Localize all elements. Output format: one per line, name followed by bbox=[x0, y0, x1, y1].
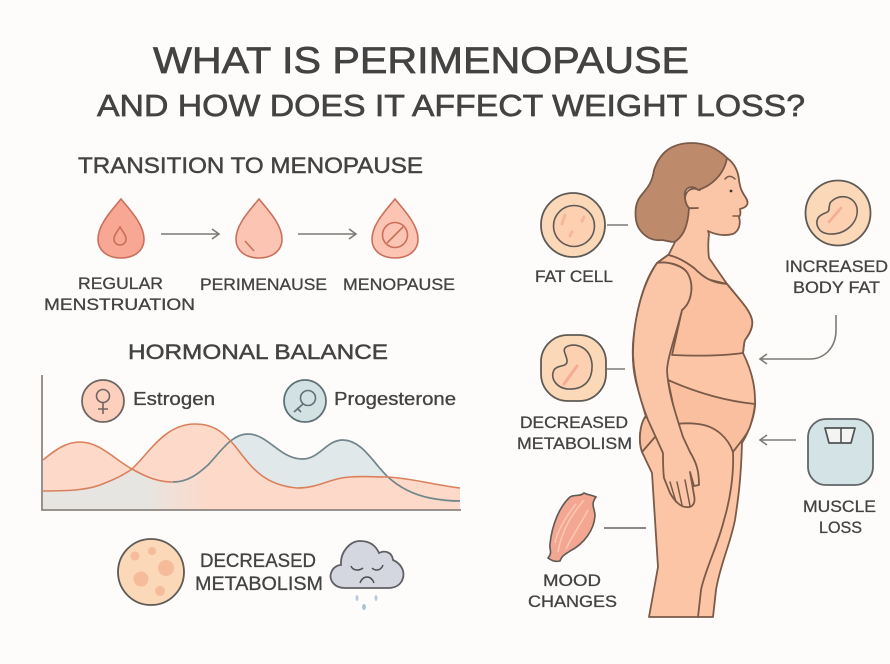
legend: estrogen bbox=[82, 380, 215, 422]
label: decreased metabolism: METABOLISM bbox=[195, 574, 323, 595]
hair bbox=[636, 143, 727, 242]
chart: hormone curves bbox=[42, 375, 461, 510]
label: decreased metabolism (right): DECREASED bbox=[520, 413, 628, 432]
title: WHAT IS PERIMENOPAUSE bbox=[153, 40, 689, 81]
fingers bbox=[670, 480, 690, 506]
label: fat cell: FAT CELL bbox=[535, 267, 613, 286]
torso and top bbox=[633, 255, 755, 617]
icon: regular menstruation drop bbox=[98, 199, 144, 258]
icon: fat cell bbox=[541, 193, 605, 257]
legend: progesterone: Progesterone bbox=[334, 389, 456, 409]
icon: increased body fat cell bbox=[806, 180, 870, 246]
connector: muscle bbox=[604, 527, 646, 529]
icon: perimenopause drop bbox=[236, 199, 282, 258]
label: increased body fat: INCREASED bbox=[785, 257, 888, 276]
connector: fat cell bbox=[607, 224, 628, 226]
axes bbox=[42, 375, 461, 510]
label: increased body fat: BODY FAT bbox=[793, 278, 880, 297]
ear bbox=[685, 189, 700, 208]
title bbox=[97, 40, 805, 123]
label: muscle loss bbox=[803, 497, 876, 537]
icon: sad cloud bbox=[331, 541, 403, 610]
label: menopause: MENOPAUSE bbox=[343, 275, 455, 294]
icon: metabolism cell bbox=[118, 539, 184, 605]
title: AND HOW DOES IT AFFECT WEIGHT LOSS? bbox=[97, 88, 805, 123]
eye bbox=[730, 190, 732, 192]
eyebrow bbox=[725, 176, 735, 179]
icon: weighing scale bbox=[808, 419, 873, 485]
connector: metabolism bbox=[607, 368, 625, 370]
label: decreased metabolism (right): METABOLISM bbox=[517, 434, 632, 453]
figure: woman in profile bbox=[633, 143, 755, 617]
grey lower area bbox=[43, 465, 208, 510]
mouth bbox=[733, 215, 739, 217]
label: regular menstruation: REGULAR bbox=[78, 274, 163, 293]
bra top bbox=[657, 255, 752, 356]
neck and face bbox=[668, 158, 748, 284]
label: muscle loss: MUSCLE bbox=[803, 497, 876, 516]
progesterone curve bbox=[173, 434, 460, 501]
label: mood changes: MOOD bbox=[543, 571, 601, 590]
label: regular menstruation: MENSTRUATION bbox=[44, 295, 195, 314]
label: decreased metabolism bbox=[195, 551, 323, 595]
panel: transition stages bbox=[44, 199, 455, 314]
back hip detail bbox=[640, 417, 655, 452]
progesterone area bbox=[173, 434, 388, 510]
arrow: to menopause bbox=[298, 229, 356, 239]
waistband and belly bbox=[668, 380, 755, 452]
heading: hormonal balance: HORMONAL BALANCE bbox=[128, 341, 388, 364]
arrow: muscle loss to hips bbox=[760, 435, 796, 445]
label: decreased metabolism: DECREASED bbox=[200, 551, 316, 572]
arm and hand bbox=[633, 263, 699, 507]
arrow: to perimenopause bbox=[161, 229, 219, 239]
first estrogen curve bbox=[43, 442, 173, 482]
label: increased body fat bbox=[785, 257, 888, 297]
legend: progesterone bbox=[284, 380, 456, 422]
label: regular menstruation bbox=[44, 274, 195, 314]
second estrogen curve bbox=[43, 424, 460, 491]
arrow: body fat to belly bbox=[760, 315, 836, 364]
icon: decreased metabolism cell bbox=[541, 335, 606, 401]
icon: muscle bbox=[548, 493, 596, 561]
hip line bbox=[698, 452, 733, 617]
legend: estrogen: Estrogen bbox=[133, 389, 215, 409]
label: decreased metabolism (right) bbox=[517, 413, 632, 453]
label: mood changes bbox=[528, 571, 617, 611]
heading: transition to menopause: TRANSITION TO MENOPAUSE bbox=[78, 153, 423, 178]
icon: menopause drop bbox=[372, 199, 418, 258]
first estrogen bump area bbox=[43, 442, 132, 510]
label: muscle loss: LOSS bbox=[819, 518, 862, 537]
second estrogen area bbox=[43, 424, 460, 510]
label: perimenause: PERIMENAUSE bbox=[200, 275, 327, 294]
label: mood changes: CHANGES bbox=[528, 592, 617, 611]
